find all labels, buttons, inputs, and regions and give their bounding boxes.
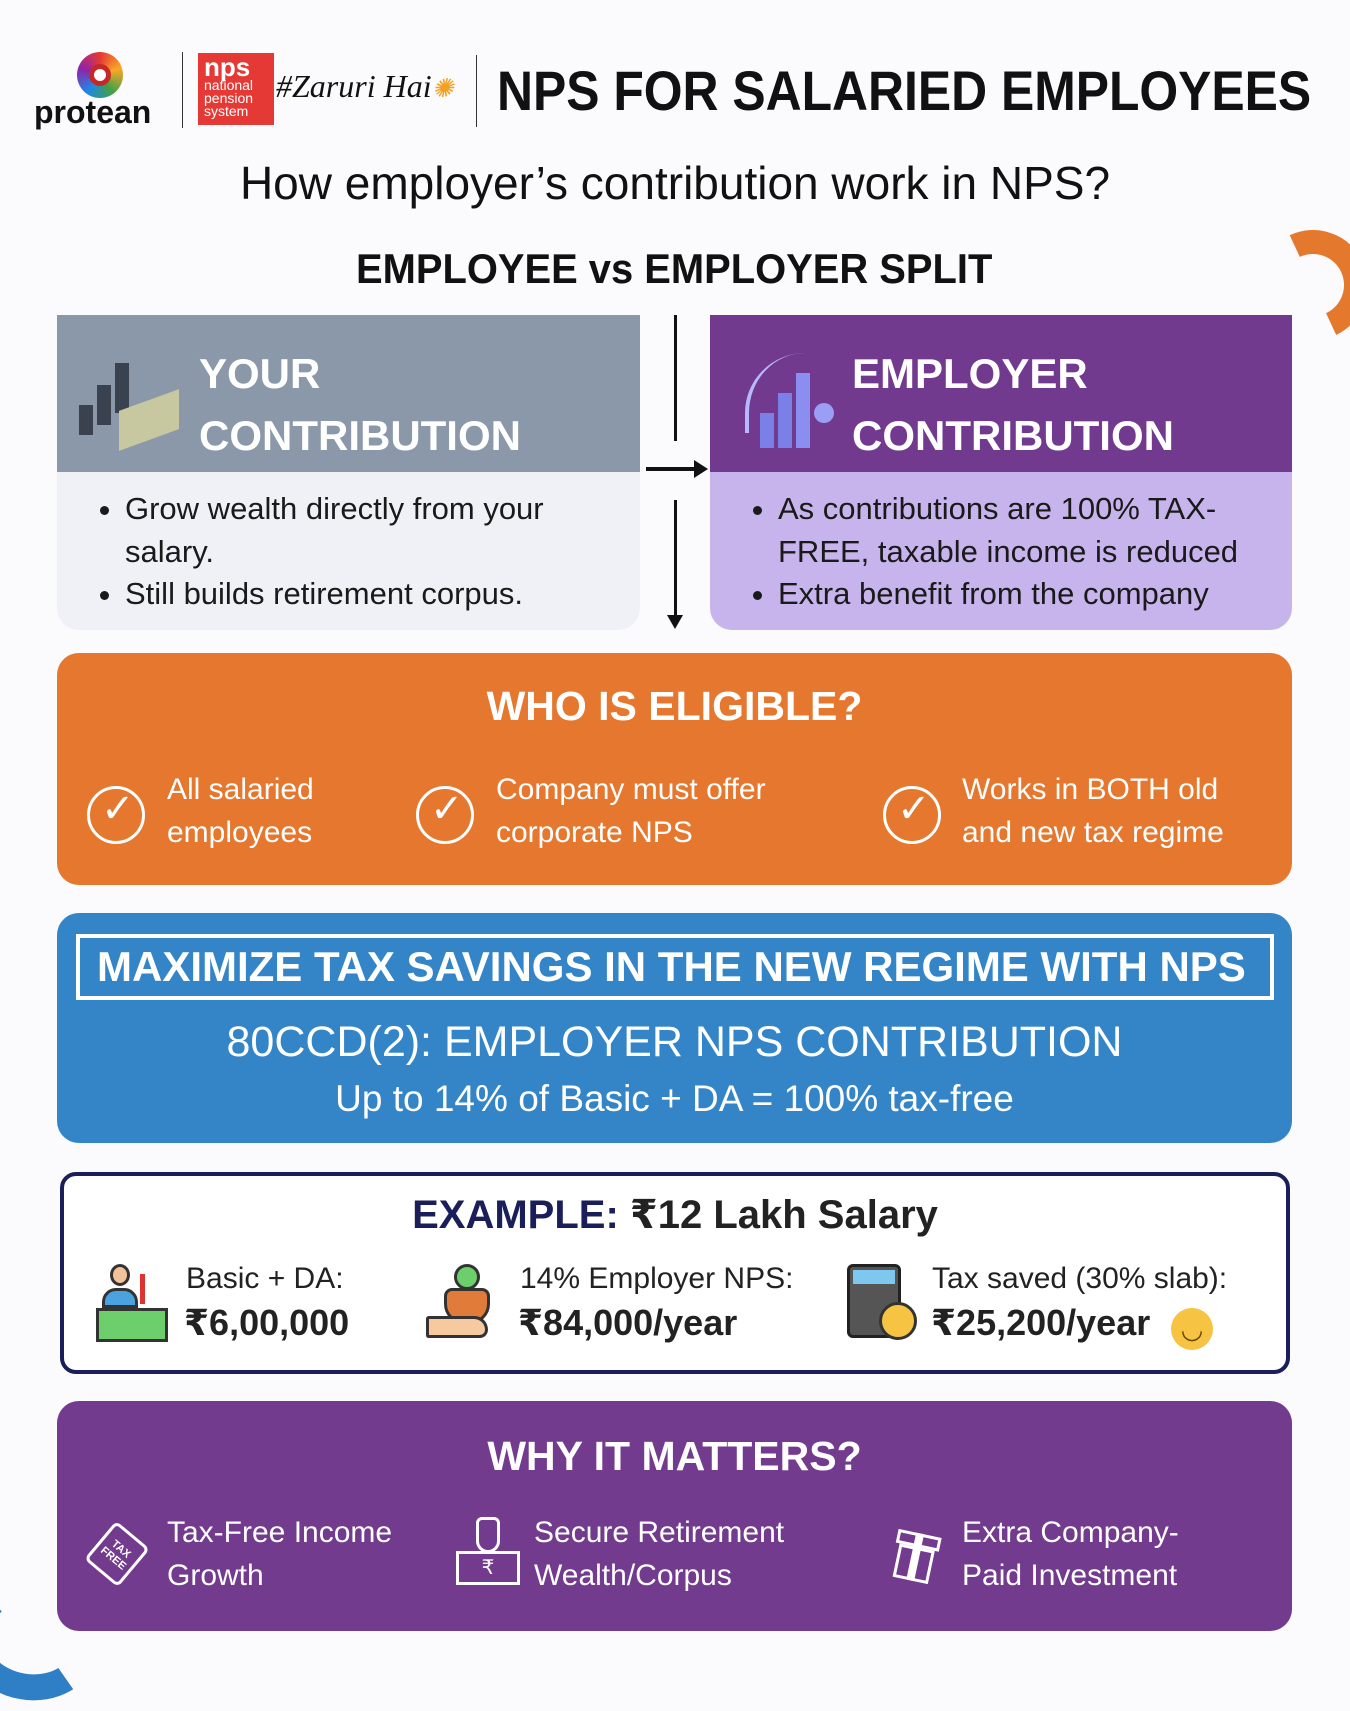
item: tax saved (847, 1262, 1227, 1350)
heading: WHO IS ELIGIBLE? (487, 683, 862, 729)
heading: WHY IT MATTERS? (487, 1433, 862, 1479)
text: employer bullets: As contributions are 100% TAX-FREE, taxable income is reduced (778, 491, 1238, 568)
icon: gift (892, 1528, 942, 1584)
icon: growth chart (745, 353, 834, 448)
heading box (76, 934, 1274, 1000)
icon: money stairs (79, 363, 179, 451)
item: both regimes: Works in BOTH old (962, 773, 1218, 806)
item: tax-free growth: Growth (167, 1559, 264, 1592)
header: EMPLOYER (852, 350, 1088, 397)
title: NPS FOR SALARIED EMPLOYEES (497, 59, 1311, 122)
decorative arc: orange (1243, 215, 1350, 355)
panel: your contribution (57, 315, 640, 630)
heading: EXAMPLE: ₹12 Lakh Salary (412, 1193, 938, 1237)
text: up to 14%: Up to 14% of Basic + DA = 100% tax-free (335, 1078, 1014, 1119)
icon: money bag: ₹ (482, 1557, 494, 1579)
icon: calculator smile (847, 1264, 917, 1340)
text: 80CCD(2): 80CCD(2): EMPLOYER NPS CONTRIBUTION (227, 1018, 1122, 1066)
section heading: split: EMPLOYEE vs EMPLOYER SPLIT (356, 245, 992, 292)
panel: why it matters (57, 1401, 1292, 1631)
item: secure retirement: Secure Retirement (534, 1516, 784, 1549)
icon: person with money (96, 1264, 168, 1342)
panel: maximize tax savings (57, 913, 1292, 1143)
logo: nps: national (204, 77, 253, 93)
item: secure retirement (456, 1516, 784, 1592)
item: tax saved: Tax saved (30% slab): (932, 1262, 1227, 1295)
item: both regimes: and new tax regime (962, 816, 1224, 849)
logo: nps: nps (204, 52, 250, 82)
header: YOUR (199, 350, 320, 397)
icon: tax-free tag: TAX (109, 1538, 133, 1561)
item: company must offer: ✓ (430, 787, 464, 831)
header (57, 315, 640, 472)
logo: nps: pension (204, 90, 253, 106)
header: CONTRIBUTION (852, 412, 1174, 459)
logo: nps (198, 53, 274, 125)
header: CONTRIBUTION (199, 412, 521, 459)
text: your contribution bullets: Still builds retirement corpus. (125, 576, 523, 611)
item: all salaried: employees (167, 816, 312, 849)
panel: employer contribution (710, 315, 1292, 630)
header (710, 315, 1292, 472)
item: tax-free growth (86, 1516, 392, 1592)
item: company must offer: Company must offer (496, 773, 766, 806)
icon: tax-free tag (84, 1521, 150, 1587)
item: tax saved: ₹25,200/year (931, 1302, 1150, 1343)
icon: smiley (1171, 1308, 1213, 1350)
text: your contribution bullets (100, 491, 544, 611)
item: all salaried (87, 773, 314, 849)
arrows: flow (646, 315, 708, 629)
item: basic + DA: ₹6,00,000 (184, 1302, 349, 1343)
text: employer bullets: Extra benefit from the company (778, 576, 1209, 611)
item: basic + DA: Basic + DA: (186, 1262, 344, 1295)
logo: zaruri hai: #Zaruri Hai✺ (276, 68, 453, 104)
item: both regimes: ✓ (897, 787, 931, 831)
item: company must offer: corporate NPS (496, 816, 693, 849)
item: extra company investment: Paid Investment (962, 1559, 1177, 1592)
icon: tax-free tag: FREE (98, 1545, 128, 1573)
item: company must offer (416, 773, 766, 849)
item: employer NPS: 14% Employer NPS: (520, 1262, 793, 1295)
text: your contribution bullets: Grow wealth directly from your salary. (125, 491, 544, 568)
panel: who is eligible (57, 653, 1292, 885)
item: extra company investment (892, 1516, 1179, 1592)
icon: smiley: ◡ (1181, 1314, 1203, 1344)
logo: nps: system (204, 103, 248, 119)
item: tax-free growth: Tax-Free Income (167, 1516, 392, 1549)
item: all salaried: ✓ (101, 787, 135, 831)
item: employer NPS (426, 1262, 793, 1343)
logo: protean: protean (34, 94, 151, 130)
item: both regimes (883, 773, 1224, 849)
decorative arc: blue (0, 1569, 109, 1711)
item: basic + DA (96, 1262, 349, 1343)
item: all salaried: All salaried (167, 773, 314, 806)
icon: hand with money bag (426, 1264, 490, 1338)
text: employer bullets (753, 491, 1238, 611)
panel: maximize tax savings: MAXIMIZE TAX SAVINGS IN THE NEW REGIME WITH NPS (97, 943, 1246, 990)
item: extra company investment: Extra Company- (962, 1516, 1179, 1549)
subtitle: How employer’s contribution work in NPS? (240, 157, 1110, 209)
item: employer NPS: ₹84,000/year (518, 1302, 737, 1343)
logo: protean (34, 52, 151, 130)
icon: money bag (456, 1517, 520, 1585)
panel: example (60, 1172, 1290, 1374)
item: secure retirement: Wealth/Corpus (534, 1559, 732, 1592)
